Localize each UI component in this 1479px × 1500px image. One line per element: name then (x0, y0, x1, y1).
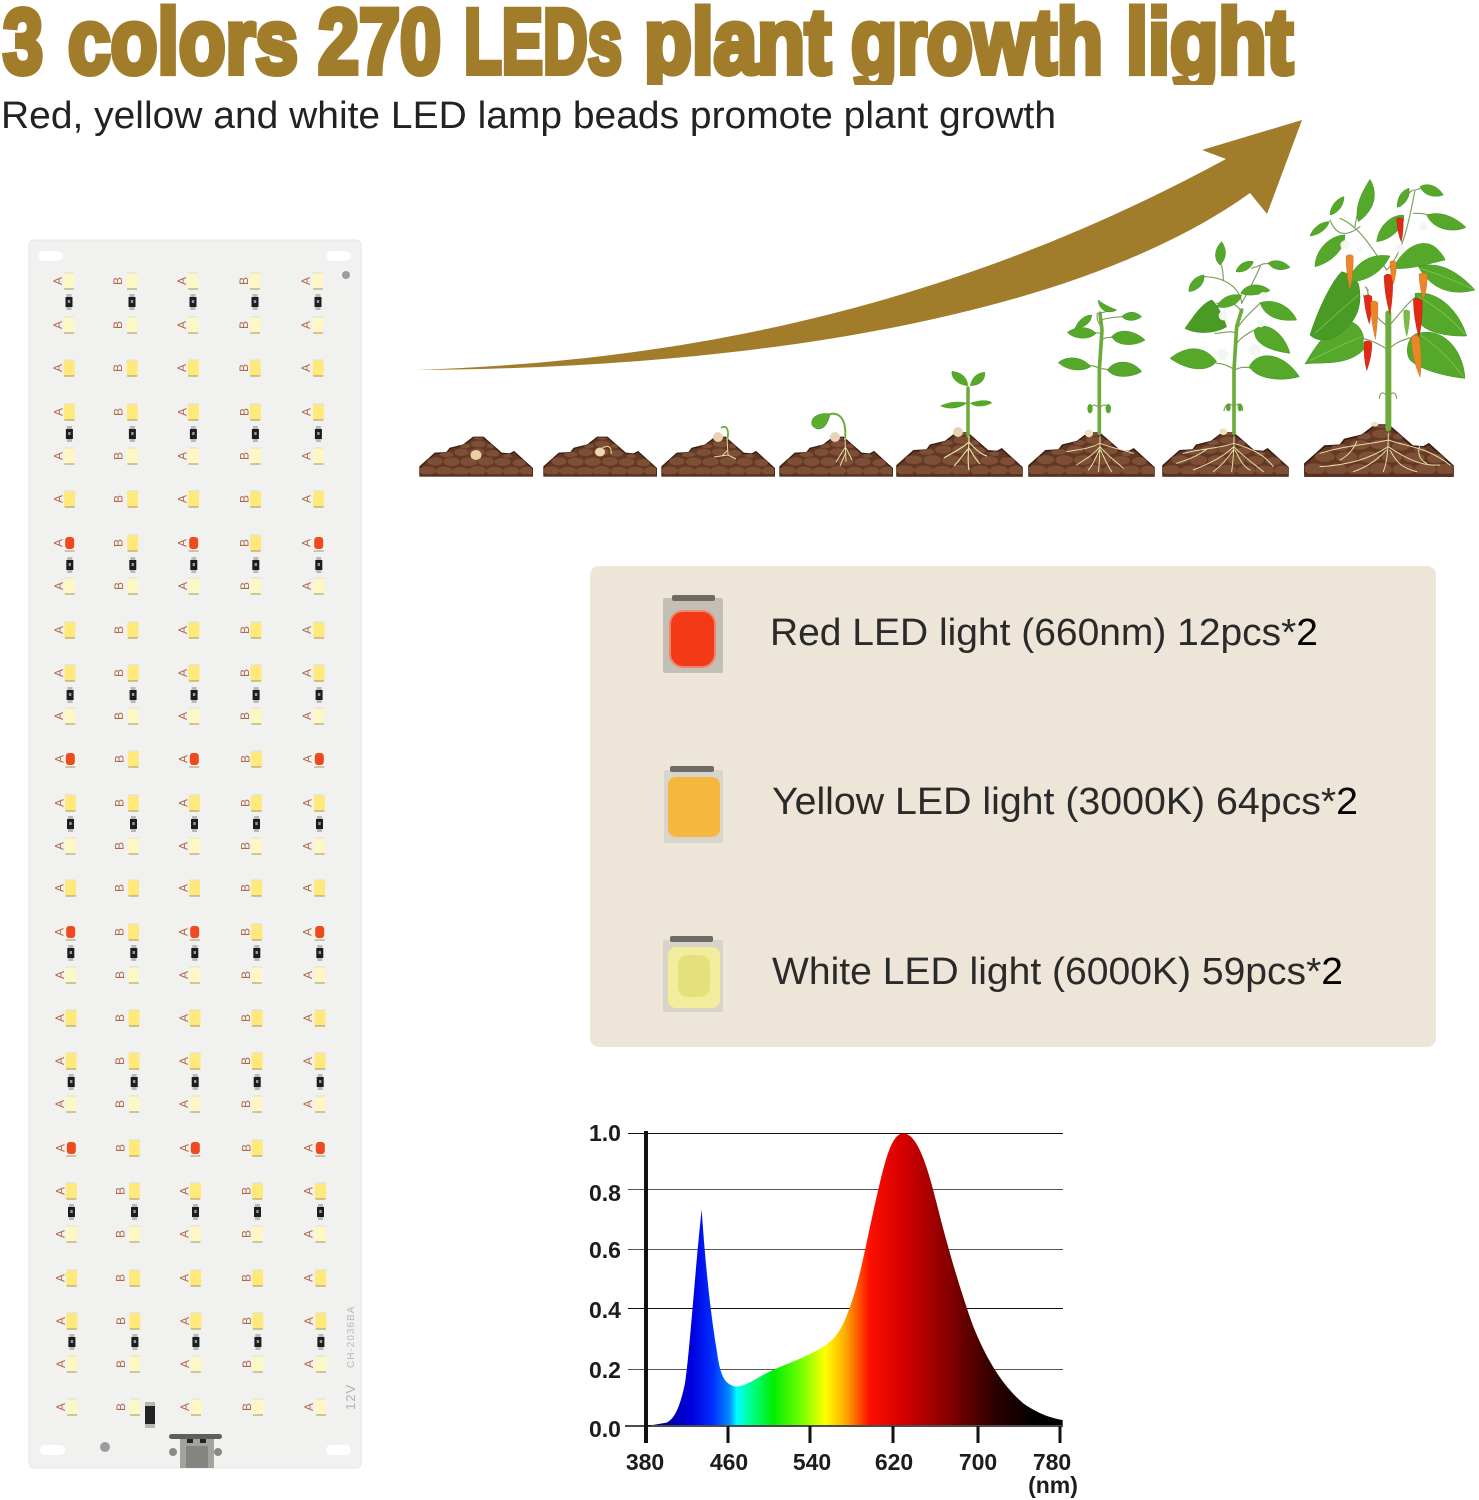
x axis labels: (nm) (1028, 1472, 1078, 1498)
grid lines (628, 1134, 1063, 1370)
USB-C connector (169, 1434, 222, 1468)
resistors (66, 294, 324, 1350)
y axis labels: 0.6 (589, 1237, 621, 1263)
LED rows: ABABA (52, 495, 314, 503)
y axis labels: 1.0 (589, 1120, 621, 1146)
driver chip (145, 1402, 155, 1428)
LED rows: ABABA (54, 1317, 316, 1325)
LED rows: ABABA (53, 1144, 315, 1152)
LED rows (51, 272, 326, 1416)
LED rows: ABABA (54, 1360, 316, 1368)
LED rows: ABABA (52, 712, 314, 720)
LED rows: ABABA (53, 1014, 315, 1022)
white LED label: White LED light (6000K) 59pcs* 2 (772, 951, 1343, 993)
axes and ticks (625, 1131, 1063, 1443)
stage 5: seedling (896, 371, 1025, 476)
x axis labels: 460 (710, 1449, 748, 1475)
LED rows: ABABA (53, 884, 315, 892)
LED rows: ABABA (53, 1187, 315, 1195)
yellow LED label: Yellow LED light (3000K) 64pcs* 2 (772, 781, 1358, 823)
LED rows: ABABA (51, 321, 313, 329)
x axis labels: 380 (626, 1449, 664, 1475)
legend panel (590, 566, 1436, 1047)
stage 1: seed (419, 436, 535, 476)
white LED chip (663, 936, 723, 1012)
x axis labels: 780 (1033, 1449, 1071, 1475)
LED rows: ABABA (53, 971, 315, 979)
LED rows: ABABA (54, 1403, 316, 1411)
LED board (29, 240, 361, 1468)
y axis labels: 0.2 (589, 1357, 621, 1383)
spectrum chart (589, 1120, 1078, 1498)
mounting slots (38, 251, 351, 1455)
subtitle: Red, yellow and white LED lamp beads promote plant growth (1, 95, 1056, 137)
stage 4: first leaf (779, 414, 895, 476)
title (2, 4, 1295, 85)
stage 3: sprout (661, 427, 777, 476)
LED rows: ABABA (52, 842, 314, 850)
x axis labels (626, 1449, 1078, 1498)
stage 2: germinating seed (543, 436, 659, 476)
board base (29, 240, 361, 1468)
red LED label: Red LED light (660nm) 12pcs* 2 (770, 612, 1318, 654)
mounting dots (100, 271, 350, 1452)
x axis labels: 700 (959, 1449, 997, 1475)
board voltage text: 12V (343, 1384, 358, 1410)
y axis labels: 0.4 (589, 1297, 621, 1323)
stage 7: flowering plant (1170, 242, 1299, 472)
LED rows: ABABA (53, 928, 315, 936)
LED rows: ABABA (53, 1100, 315, 1108)
LED rows: ABABA (54, 1230, 316, 1238)
LED rows: ABABA (52, 539, 314, 547)
LED rows: ABABA (52, 626, 314, 634)
LED rows: ABABA (54, 1274, 316, 1282)
spectrum curve (647, 1133, 1063, 1426)
panel background (590, 566, 1436, 1047)
board model text: CH-2036BA (346, 1306, 357, 1368)
x axis labels: 620 (875, 1449, 913, 1475)
LED rows: ABABA (52, 755, 314, 763)
LED rows: ABABA (51, 364, 313, 372)
LED rows: ABABA (51, 452, 313, 460)
LED rows: ABABA (53, 1057, 315, 1065)
stage 8: fruiting pepper plant (1305, 179, 1475, 472)
yellow LED chip (664, 766, 723, 843)
LED rows: ABABA (52, 669, 314, 677)
stage 6: young plant (1058, 300, 1145, 472)
LED rows: ABABA (51, 408, 313, 416)
LED rows: ABABA (51, 277, 313, 285)
y axis labels: 0.0 (589, 1416, 621, 1442)
soil stages 6-8 (1028, 424, 1456, 476)
red LED chip (663, 595, 723, 673)
LED rows: ABABA (52, 799, 314, 807)
y axis labels (589, 1120, 621, 1442)
LED rows: ABABA (52, 582, 314, 590)
soil mounds and plant growth stages (419, 179, 1475, 476)
x axis labels: 540 (793, 1449, 831, 1475)
growth arrow (416, 120, 1302, 370)
y axis labels: 0.8 (589, 1180, 621, 1206)
